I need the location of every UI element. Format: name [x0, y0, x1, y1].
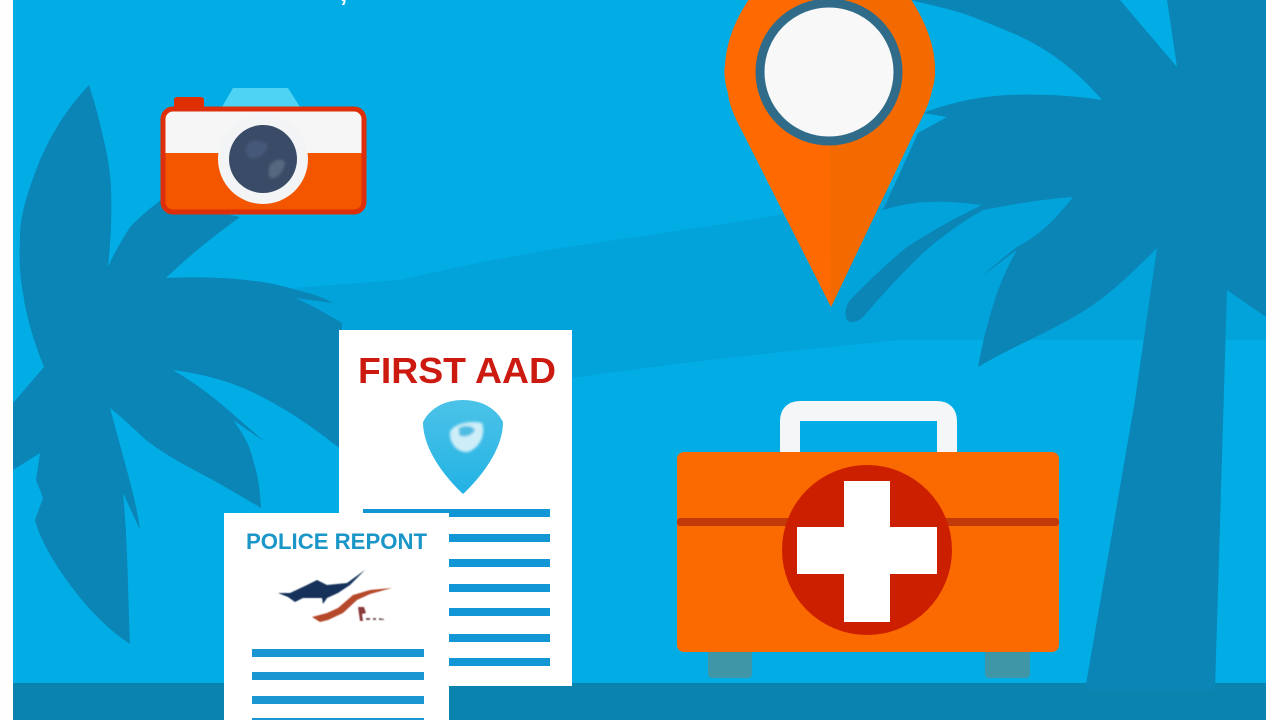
trunk	[1085, 248, 1227, 690]
shield emblem	[423, 400, 503, 494]
camera shutter button	[174, 97, 204, 110]
police report heading: POLICE REPONT	[246, 529, 428, 554]
camera body	[163, 109, 364, 213]
left palm silhouette	[13, 85, 342, 644]
police report text lines	[252, 649, 424, 720]
kit handle	[790, 411, 947, 460]
camera lens	[229, 125, 297, 193]
icon: location pin	[724, 0, 935, 307]
kit feet	[708, 645, 1030, 678]
first aid text lines	[363, 509, 550, 666]
smudged illustration	[278, 570, 392, 622]
right palm silhouette	[846, 0, 1266, 690]
document: first aid sheet	[339, 330, 572, 686]
first aid heading: FIRST AAD	[358, 350, 556, 391]
kit case	[677, 452, 1059, 652]
icon: first aid kit	[677, 411, 1059, 678]
kit strap	[677, 518, 1059, 526]
camera viewfinder	[222, 88, 300, 107]
document: police report sheet	[224, 513, 449, 720]
red cross badge	[782, 465, 952, 635]
icon: camera	[163, 88, 364, 213]
ground strip	[13, 683, 1266, 720]
shoreline band	[291, 189, 1266, 378]
